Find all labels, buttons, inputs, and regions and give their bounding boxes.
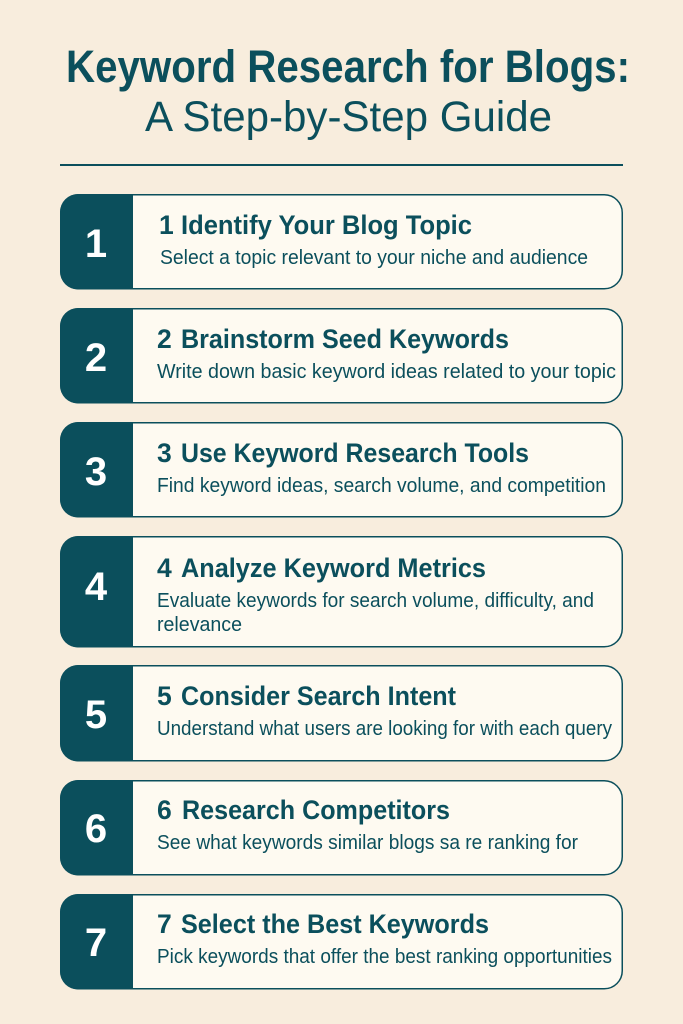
panel: step 7: 7 — [157, 909, 172, 939]
panel: step 1: Select a topic relevant to your niche and audience — [160, 247, 588, 269]
panel: step 1: 1 — [85, 222, 107, 266]
panel: step 3: Use Keyword Research Tools — [181, 438, 529, 468]
title — [66, 41, 630, 141]
panel: step 5 — [60, 665, 622, 762]
panel: step 5: 5 — [157, 681, 172, 711]
panel: step 4: 4 — [157, 553, 172, 583]
panel: step 2: Write down basic keyword ideas related to your topic — [157, 361, 616, 383]
panel: step 6: See what keywords similar blogs sa re ranking for — [157, 832, 578, 854]
panel: step 7: Pick keywords that offer the best ranking opportunities — [157, 946, 612, 968]
panel: step 4: Evaluate keywords for search volume, difficulty, and — [157, 590, 594, 612]
panel: step 7 — [60, 894, 622, 990]
panel: step 3: 3 — [157, 438, 172, 468]
panel: step 1: Identify Your Blog Topic — [181, 210, 472, 240]
panel: step 1 — [60, 194, 622, 290]
panel: step 5: 5 — [85, 693, 107, 737]
panel: step 3: Find keyword ideas, search volume, and competition — [157, 475, 606, 497]
panel: step 5: Understand what users are looking for with each query — [157, 718, 612, 740]
panel: step 2: Brainstorm Seed Keywords — [181, 324, 509, 354]
panel: step 6 — [60, 780, 622, 876]
panel: step 4: 4 — [85, 565, 108, 609]
panel: step 5: Consider Search Intent — [181, 681, 456, 711]
panel: step 6: 6 — [157, 795, 172, 825]
panel: step 7: 7 — [85, 921, 107, 965]
panel: step 4: relevance — [157, 614, 242, 636]
panel: step 2: 2 — [157, 324, 172, 354]
panel: step 2: 2 — [85, 336, 107, 380]
panel: step 6: 6 — [85, 807, 107, 851]
panel: step 1: 1 — [159, 210, 174, 240]
title: Keyword Research for Blogs: — [66, 41, 630, 92]
panel: step 7: Select the Best Keywords — [181, 909, 489, 939]
title: A Step-by-Step Guide — [145, 94, 552, 141]
panel: step 4 — [60, 536, 622, 648]
panel: step 6: Research Competitors — [182, 795, 450, 825]
panel: step 4: Analyze Keyword Metrics — [181, 553, 486, 583]
panel: step 2 — [60, 308, 622, 404]
panel: step 3 — [60, 422, 622, 518]
panel: step 3: 3 — [85, 450, 107, 494]
